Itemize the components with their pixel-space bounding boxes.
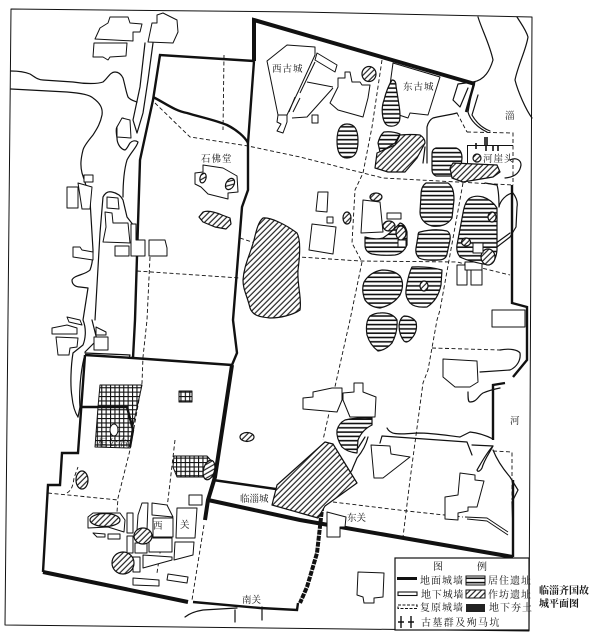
legend: surface wall: 地面城墙 (420, 574, 464, 587)
building: Shifotang site (195, 165, 238, 199)
place-name labels: 东古城 (403, 81, 435, 93)
map title (539, 584, 589, 610)
wall: south of small city (43, 572, 188, 602)
legend: workshop site: 作坊遗址 (488, 588, 532, 601)
place-name labels: 西古城 (272, 63, 304, 75)
wall: outer south wall (208, 500, 513, 557)
place-name labels: 河 (510, 416, 520, 427)
map title: 城平面图 (539, 597, 579, 610)
wall: chain east of small city (300, 500, 323, 603)
place-name labels (98, 63, 520, 606)
place-name labels: 石佛堂 (201, 153, 233, 165)
wall: west upper wall (133, 55, 254, 358)
place-name labels: 淄 (505, 110, 515, 122)
wall: south stub (193, 602, 298, 610)
legend: residential site: 居住遗址 (488, 574, 532, 587)
legend: tombs and horse pit: 古墓群及殉马坑 (421, 616, 501, 629)
workshop: central large site (243, 218, 300, 318)
building: Xigu city outline (267, 45, 315, 115)
white building inside east site (361, 200, 483, 253)
place-name labels: 西 (153, 521, 163, 532)
tomb marks at Heyatou (467, 137, 513, 163)
legend panel (395, 558, 533, 630)
wall: Linzi city north (213, 480, 323, 500)
place-name labels: 河崖头 (483, 153, 515, 165)
wall: north of small city (85, 355, 232, 365)
inner palace wall (82, 407, 133, 447)
place-name labels: 关 (180, 519, 190, 531)
place-name labels: 临淄城 (240, 493, 269, 505)
map title: 临淄齐国故 (539, 584, 589, 597)
building: Donggu city outline (390, 63, 440, 118)
wall: west of small city (43, 355, 85, 572)
place-name labels: 南关 (242, 594, 262, 606)
legend: restored wall: 复原城墙 (420, 601, 464, 614)
legend: rammed earth: 地下夯土 (489, 601, 533, 614)
wall: east of small city (205, 365, 232, 520)
buildings (52, 13, 525, 603)
legend title: 图 例 (433, 560, 487, 573)
wall: north-east wall stub (466, 84, 474, 112)
legend: underground wall: 地下城墙 (421, 588, 464, 601)
workshop: tilted large site (272, 442, 357, 518)
wall: east walls (493, 185, 527, 557)
place-name labels: 桓公台 (98, 437, 130, 449)
place-name labels: 东关 (347, 512, 367, 524)
workshop sites (76, 66, 500, 574)
wall: diagonal inner wall (153, 97, 248, 143)
wall: central west wall (232, 61, 254, 365)
rammed earth: Huangong platform (95, 385, 142, 448)
residential sites (337, 80, 497, 453)
city walls (43, 20, 527, 610)
wall: main north thick wall (254, 20, 475, 84)
rammed-earth sites (95, 385, 217, 481)
dashed restored roads (48, 55, 513, 600)
